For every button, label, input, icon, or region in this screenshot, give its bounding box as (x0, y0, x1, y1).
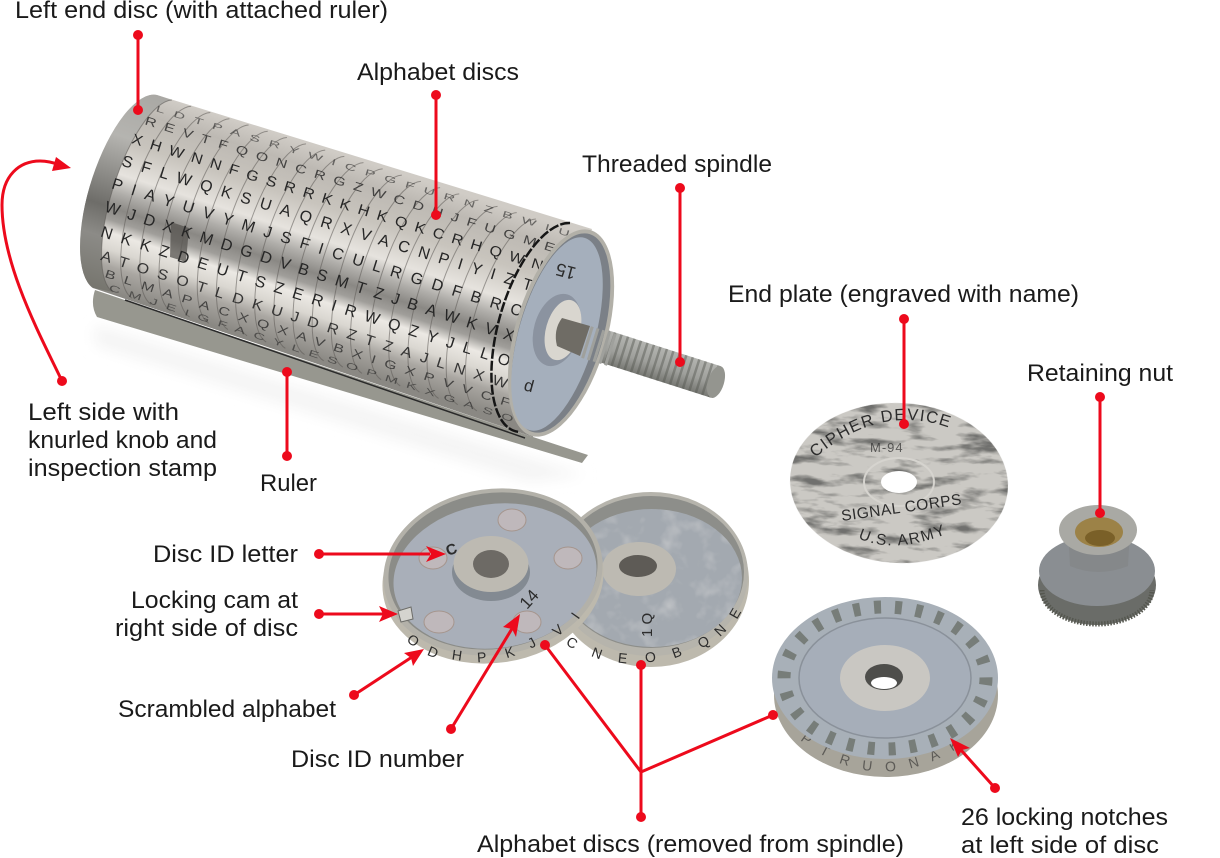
nut collar (1059, 505, 1137, 555)
label: locking notches (961, 804, 1168, 858)
scrambled edge letters (404, 609, 583, 665)
curved arrow: left side rotation (2, 157, 71, 386)
scrambled edge letters: D (425, 643, 441, 661)
thread start over shank (586, 342, 612, 350)
engraved disc letter: d (522, 376, 536, 396)
cylinder body (80, 95, 592, 437)
scrambled letter rows on discs: XHWNNFGSRRKKHKQKCRHQWN (130, 131, 545, 274)
photo: end plate (790, 402, 1008, 564)
scrambled letter rows on discs: LDTPASRYWICPGFURNZBWIU (155, 103, 571, 239)
nut top face (1039, 536, 1155, 606)
left end disc band (80, 95, 172, 292)
scrambled edge letters: K (503, 643, 517, 661)
leader: removed alphabet discs (540, 640, 778, 822)
label: locking cam (115, 587, 298, 642)
rear disc edge letters: E (617, 650, 628, 666)
photo: assembled cipher cylinder (80, 93, 728, 482)
rear disc edge letters: C (564, 633, 581, 652)
leader: ruler (282, 368, 292, 460)
scrambled letter rows on discs: WJDXKMDGDVBSMTZJBAWKVX (103, 199, 517, 346)
threaded spindle (578, 338, 728, 400)
scrambled edge letters: I (568, 609, 583, 622)
label: locking cam: Locking cam at (131, 587, 298, 614)
plate hole (881, 471, 917, 493)
label: threaded spindle: Threaded spindle (582, 151, 772, 178)
rear disc edge letters: N (590, 644, 605, 662)
scrambled letter rows on discs: OOCKVGJXMYYNGLONZNNEG (169, 93, 563, 219)
rear disc edge (553, 495, 749, 667)
disc edge (774, 613, 998, 777)
spindle shank over face (556, 318, 590, 356)
engraving: U.S. ARMY (860, 524, 942, 546)
leader: alphabet discs (432, 90, 440, 220)
rear disc edge letters: O (644, 648, 657, 665)
label: locking notches: 26 locking notches (961, 804, 1168, 831)
front disc edge (371, 480, 615, 678)
label: ruler: Ruler (260, 470, 317, 497)
engraving: SIGNAL CORPS (840, 491, 963, 525)
leader: end plate (900, 314, 908, 428)
plate body (786, 397, 1012, 569)
arrow: scrambled alphabet (349, 649, 424, 700)
scrambled edge letters: O (404, 631, 423, 650)
leader: retaining nut (1096, 392, 1104, 518)
scrambled letter rows on discs: BLMAPACXQXAVBXIGXPVVCF (103, 267, 512, 409)
threaded brass hole (1075, 517, 1123, 547)
right end face (487, 217, 635, 449)
scrambled letter rows on discs: ATOSOTLDKUJDRZTZAJLNXW (99, 248, 510, 392)
rear disc edge letters: B (670, 643, 684, 661)
pale dimples (419, 509, 582, 633)
rear disc edge letters: E (726, 605, 744, 621)
front disc hub (452, 536, 530, 601)
arrow: disc id letter (314, 546, 446, 562)
label: removed alphabet discs: Alphabet discs (removed from spindle) (477, 831, 904, 858)
scrambled letter rows on discs: CMJEIGFACYLESOPMKXGASO (108, 282, 515, 424)
label: retaining nut: Retaining nut (1027, 360, 1173, 387)
disc face (772, 597, 998, 759)
label: alphabet discs: Alphabet discs (357, 59, 519, 86)
rear disc edge letters (564, 605, 744, 666)
label: disc id number: Disc ID number (291, 746, 464, 773)
inspection stamp dark patch (170, 222, 189, 262)
photo: retaining nut (1038, 505, 1156, 625)
rear disc edge letters: Q (695, 632, 712, 651)
disc grooves (102, 100, 536, 411)
recessed ring (799, 618, 971, 738)
engraving (810, 408, 963, 546)
rear disc floor (562, 509, 742, 647)
label: left side: Left side with (28, 399, 179, 426)
nut neck (1068, 530, 1130, 572)
photo: notched alphabet disc: P T R U O N A K (801, 735, 954, 772)
arrow: locking cam (314, 606, 398, 622)
arrow: locking notches (950, 738, 1000, 793)
scrambled letter rows on discs: PIAYUVYMJSFICULRGDFBRC (110, 176, 524, 320)
locking notches (784, 607, 986, 749)
scrambled letter rows on discs: REVTFQONCRGZWCDHJFUGME (143, 114, 557, 255)
engraving: CIPHER DEVICE (810, 408, 951, 456)
label: locking cam: right side of disc (115, 615, 298, 642)
label: scrambled alphabet: Scrambled alphabet (118, 696, 336, 723)
disc id number: 14 (516, 586, 543, 613)
knurled base (1038, 545, 1156, 625)
ruler contact line (125, 300, 525, 438)
scrambled edge letters: J (525, 634, 539, 651)
scrambled edge letters: P (476, 649, 487, 665)
engraving: M-94 (870, 440, 904, 455)
ruler (93, 290, 588, 463)
front disc floor (384, 491, 606, 661)
label: disc id letter: Disc ID letter (153, 541, 298, 568)
disc hole (865, 664, 903, 690)
disc hub (840, 645, 930, 711)
scrambled edge letters: H (451, 646, 463, 664)
label: end plate: End plate (engraved with name) (728, 281, 1079, 308)
scrambled letters on edge (800, 734, 978, 772)
rear disc edge letters: N (711, 621, 729, 639)
rear disc id: 1 Q (639, 613, 656, 637)
scrambled letter rows on discs: SFLWQKSUAQRXVACNPIYIZT (120, 153, 535, 295)
engraved disc number: 15 (554, 259, 578, 283)
photo: rear open disc (553, 492, 749, 667)
end disc gap (491, 223, 570, 432)
rear disc wall (558, 496, 744, 648)
scrambled edge letters: V (549, 621, 567, 639)
front disc rim (373, 474, 613, 670)
photo: notched alphabet disc (772, 597, 998, 777)
label: left side: knurled knob and (28, 427, 217, 454)
plate hub ring (864, 458, 934, 506)
rear disc hole (619, 555, 657, 577)
rear disc hub (602, 542, 676, 596)
photo: front open disc (371, 474, 615, 678)
label: left side: inspection stamp (28, 455, 217, 482)
front disc inner wall (378, 479, 608, 663)
cylinder shadow (95, 325, 585, 482)
disc id letter: C (444, 540, 460, 560)
scrambled letter rows on discs: NKKZDEUTSZERIRWQZYJLLO (99, 224, 512, 370)
scrambled letter rows on discs (99, 93, 571, 424)
leader: threaded spindle (676, 184, 684, 366)
arrow: disc id number (446, 614, 520, 734)
leader: left end disc (134, 30, 142, 114)
label: left side (28, 399, 217, 482)
rear disc rim (554, 492, 748, 656)
locking cam (398, 607, 413, 622)
